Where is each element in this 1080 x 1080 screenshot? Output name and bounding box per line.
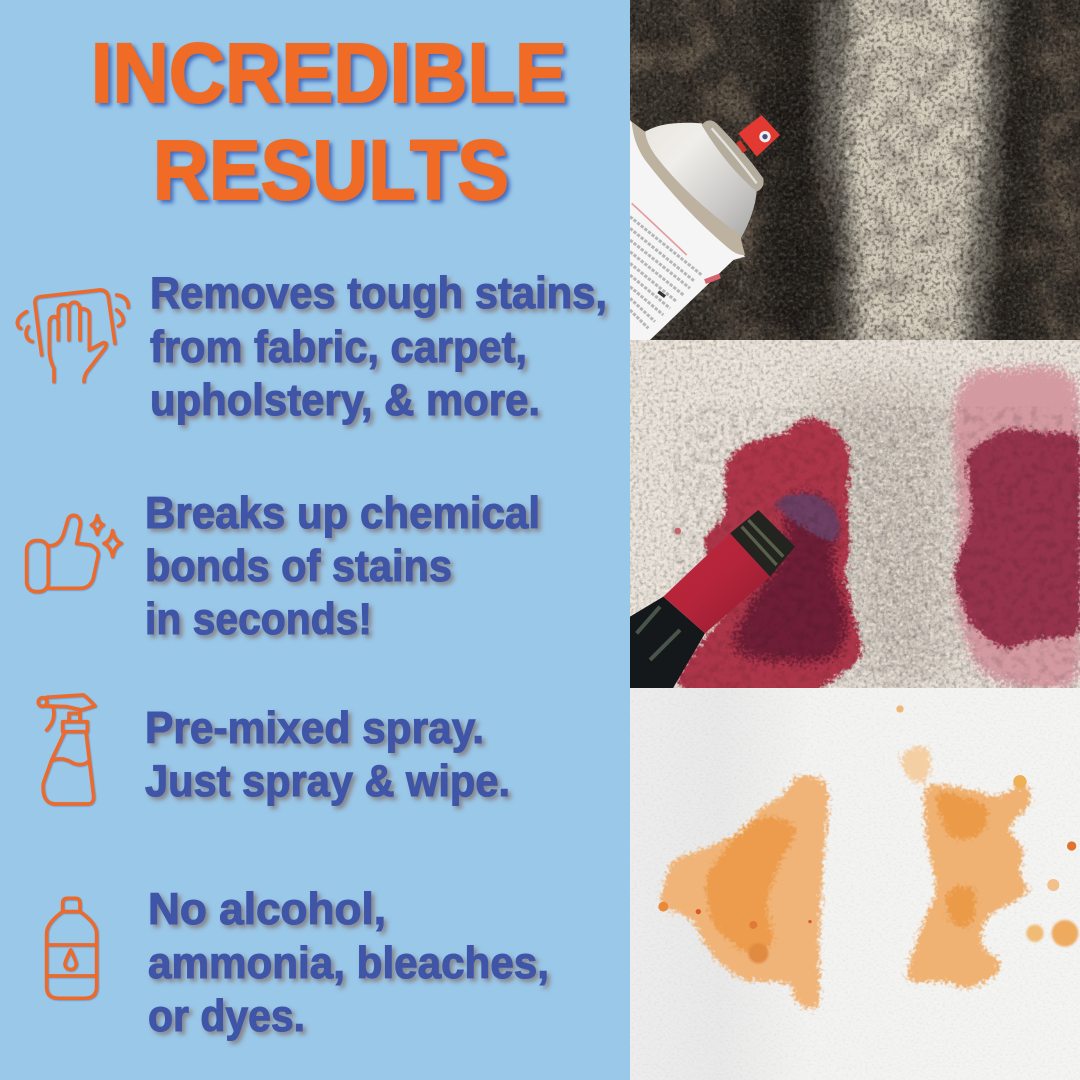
text: no alcohol, ammonia, bleaches: ammonia, bleaches, — [148, 939, 549, 988]
icon: thumbs up with sparkles — [27, 515, 121, 592]
title: RESULTS — [153, 123, 509, 217]
text: breaks up chemical bonds: in seconds! — [145, 595, 372, 644]
title — [91, 26, 567, 217]
photo: red wine spill on white carpet — [630, 340, 1080, 693]
text: removes tough stains — [150, 269, 607, 425]
text: removes tough stains: Removes tough stains, — [150, 269, 607, 318]
icon: spray bottle — [38, 695, 95, 804]
photo: orange stain on white fabric — [630, 688, 1080, 1080]
text: breaks up chemical bonds: Breaks up chemical — [145, 489, 540, 538]
text: no alcohol, ammonia, bleaches: No alcohol, — [148, 885, 386, 934]
text: breaks up chemical bonds — [145, 489, 540, 644]
panel: blue background — [0, 0, 630, 1080]
title: INCREDIBLE — [91, 26, 567, 120]
photo: spray can on dark carpet — [630, 0, 1080, 360]
text: removes tough stains: upholstery, & more. — [150, 376, 540, 425]
text: pre-mixed spray: Just spray & wipe. — [145, 757, 510, 806]
wine bottle — [630, 510, 795, 693]
icon: bottle with drop — [47, 898, 97, 998]
spray can — [630, 115, 780, 340]
text: breaks up chemical bonds: bonds of stains — [145, 542, 452, 591]
icon: hand wiping with cloth — [17, 290, 128, 382]
text: no alcohol, ammonia, bleaches — [148, 885, 549, 1041]
text: pre-mixed spray — [145, 704, 510, 806]
text: pre-mixed spray: Pre-mixed spray. — [145, 704, 484, 753]
text: removes tough stains: from fabric, carpet, — [150, 323, 527, 372]
red nozzle — [738, 115, 780, 157]
text: no alcohol, ammonia, bleaches: or dyes. — [148, 992, 305, 1041]
